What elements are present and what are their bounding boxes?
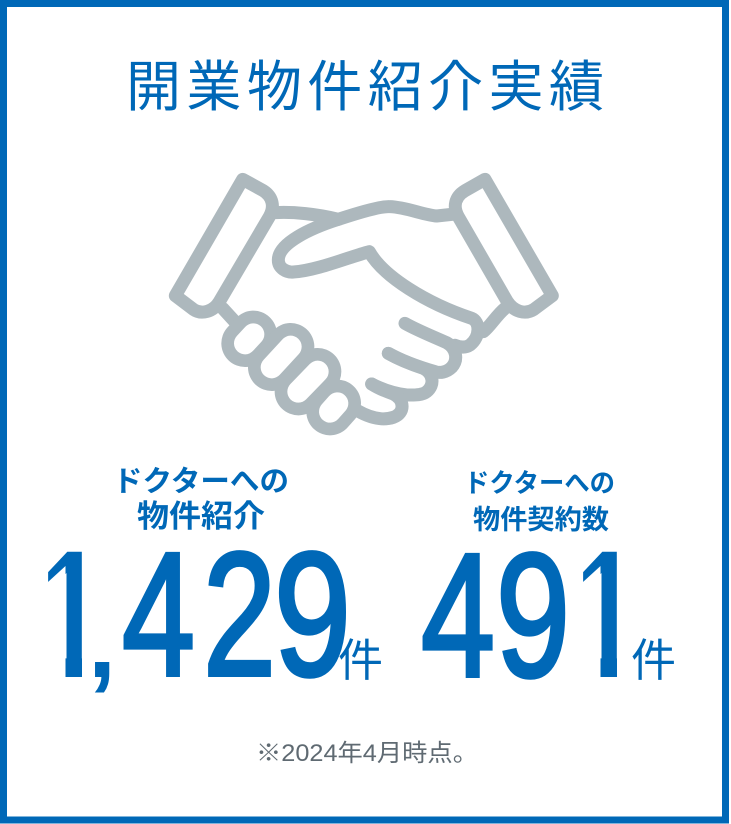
number: 491 contracts: 1 — [576, 512, 638, 716]
unit: contracts: 件 — [631, 635, 676, 686]
number: 1,429 referrals: 9 — [274, 517, 351, 713]
open fingers — [388, 323, 456, 372]
label: doctor contracts: 物件契約数 — [473, 505, 609, 535]
gripped fingers — [245, 334, 337, 412]
number: 491 contracts — [422, 551, 617, 680]
number: 1,429 referrals: , — [88, 587, 116, 699]
right cuff — [455, 179, 552, 312]
number: 491 contracts: 9 — [496, 518, 570, 714]
label: doctor contracts: ドクターへの — [464, 468, 615, 498]
footnote: ※2024年4月時点。 — [256, 740, 478, 767]
number: 1,429 referrals: 2 — [203, 517, 276, 713]
number: 1,429 referrals: 4 — [122, 517, 195, 713]
label: doctor contracts — [464, 468, 615, 535]
title: 開業物件紹介実績 — [126, 56, 604, 118]
number: 1,429 referrals: 1 — [40, 512, 102, 716]
left cuff — [175, 179, 272, 312]
wrists — [223, 308, 505, 332]
label: doctor referrals — [113, 465, 289, 534]
label: doctor referrals: 物件紹介 — [137, 499, 265, 534]
unit: referrals: 件 — [338, 635, 383, 686]
thumb and back of hand — [278, 219, 478, 347]
number: 491 contracts: 4 — [421, 518, 495, 714]
finger openings — [245, 334, 337, 412]
icon: handshake — [175, 179, 552, 419]
upper wrist and hand outline — [275, 207, 455, 219]
label: doctor referrals: ドクターへの — [113, 465, 289, 498]
number: 1,429 referrals — [48, 550, 346, 692]
